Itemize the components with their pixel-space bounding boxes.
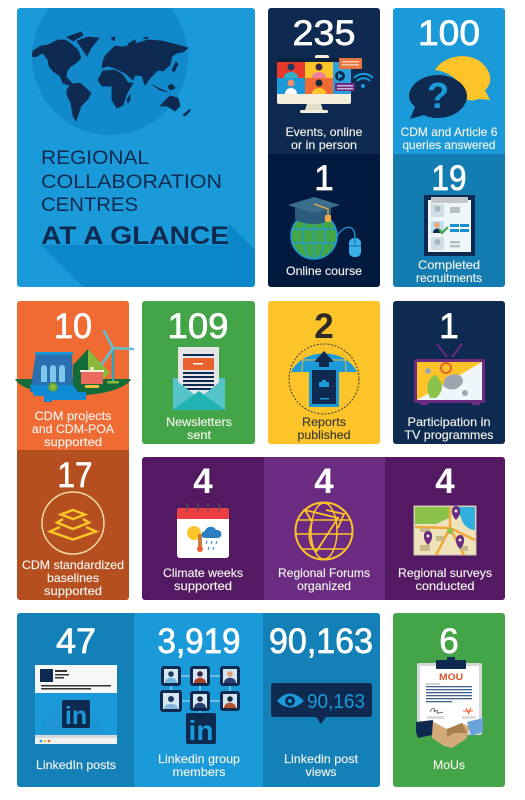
label: CDM projects (34, 409, 112, 423)
icon: graduation globe and mouse (288, 197, 361, 259)
label: TV programmes (404, 428, 494, 442)
panel: newsletters (142, 301, 255, 444)
label: recruitments (416, 271, 482, 285)
label: views (306, 765, 336, 779)
label: queries answered (402, 138, 496, 152)
panel: regional surveys (385, 457, 505, 600)
label: Linkedin post (284, 752, 359, 766)
label (22, 558, 124, 598)
icon: video conference monitor (277, 55, 373, 113)
icon: people network: in (189, 715, 213, 746)
label: Participation in (408, 415, 490, 429)
label: Completed (418, 258, 480, 272)
icon: LinkedIn post card: in (65, 702, 87, 730)
title text (41, 147, 229, 250)
panel: CDM baselines (17, 450, 129, 600)
label: published (298, 428, 350, 442)
number: 4: 4 (435, 462, 455, 501)
panel: recruitments (393, 154, 505, 287)
label: supported (44, 584, 102, 598)
label (32, 409, 114, 449)
label: organized (297, 579, 351, 593)
icon: views badge: 90,163 (307, 691, 365, 713)
globe backdrop circle (32, 0, 188, 135)
panel: reports (268, 301, 380, 444)
icon: views badge (271, 683, 372, 724)
number: 19: 19 (432, 159, 466, 198)
title text: REGIONAL (41, 147, 149, 169)
number: 4: 4 (193, 462, 213, 501)
label (166, 415, 232, 442)
label: Climate weeks (163, 566, 243, 580)
title text: COLLABORATION (41, 171, 222, 193)
number: 90,163: 90,163 (269, 622, 373, 661)
icon: calendar with weather (177, 503, 229, 558)
number: 1: 1 (439, 307, 459, 346)
number: 4: 4 (314, 462, 334, 501)
icon: yellow globe (296, 502, 352, 560)
label: supported (44, 435, 102, 449)
label (398, 566, 492, 593)
panel: LinkedIn posts (17, 613, 134, 787)
label (404, 415, 494, 442)
panel: climate weeks (142, 457, 264, 600)
number: 235: 235 (292, 14, 356, 53)
title text: CENTRES (41, 194, 138, 216)
number: 17: 17 (58, 456, 92, 495)
icon: map with pins (414, 506, 476, 555)
icon: layers in a ring (42, 492, 104, 554)
icon: speech bubbles (409, 56, 490, 119)
long shadow (41, 224, 255, 287)
label: Online course (286, 264, 362, 278)
icon: world map (32, 32, 190, 121)
label (284, 752, 359, 779)
label: sent (187, 428, 212, 442)
label: baselines (47, 571, 99, 585)
label: Linkedin group (158, 752, 240, 766)
panel: title hero (17, 0, 255, 287)
number: 6: 6 (439, 622, 459, 661)
number: 100: 100 (418, 14, 480, 53)
panel: TV programmes (393, 301, 505, 444)
label: supported (174, 579, 232, 593)
icon: television (414, 344, 485, 405)
label: Regional surveys (398, 566, 492, 580)
label (158, 752, 240, 779)
panel: CDM projects (15, 301, 133, 450)
label (286, 125, 363, 152)
label (298, 415, 350, 442)
label: conducted (416, 579, 474, 593)
label: Newsletters (166, 415, 232, 429)
label: CDM standardized (22, 558, 124, 572)
panel: MoUs (393, 613, 505, 787)
icon: hydro dam, stove and wind turbine (15, 331, 133, 402)
icon: candidate clipboard (424, 195, 475, 256)
icon: report and globe (289, 344, 359, 414)
label: or in person (291, 138, 357, 152)
icon: people network (160, 666, 240, 746)
label: MoUs (433, 758, 465, 772)
panel: LinkedIn group members (134, 613, 263, 787)
label: Events, online (286, 125, 363, 139)
icon: LinkedIn post card (35, 665, 117, 744)
label (400, 125, 498, 152)
panel: LinkedIn post views (263, 613, 380, 787)
panel: online course (268, 154, 380, 287)
panel: queries answered (393, 8, 505, 154)
label: and CDM-POA (32, 422, 114, 436)
label: members (172, 765, 226, 779)
number: 2: 2 (314, 307, 334, 346)
icon: MoU clipboard and handshake (416, 657, 483, 748)
number: 109: 109 (168, 307, 228, 346)
number: 47: 47 (56, 622, 96, 661)
label (163, 566, 243, 593)
number: 10: 10 (54, 307, 92, 346)
title text: AT A GLANCE (41, 222, 229, 250)
icon: MoU clipboard and handshake: MOU (439, 672, 463, 682)
label (278, 566, 370, 593)
number: 1: 1 (314, 159, 334, 198)
label: Regional Forums (278, 566, 370, 580)
panel: events (268, 8, 380, 154)
label: LinkedIn posts (36, 758, 116, 772)
label (416, 258, 482, 285)
icon: newsletter in envelope (173, 347, 225, 410)
label: Reports (302, 415, 346, 429)
number: 3,919: 3,919 (158, 622, 240, 661)
panel: regional forums (264, 457, 385, 600)
label: CDM and Article 6 (400, 125, 498, 139)
icon: speech bubbles: ? (427, 75, 449, 116)
